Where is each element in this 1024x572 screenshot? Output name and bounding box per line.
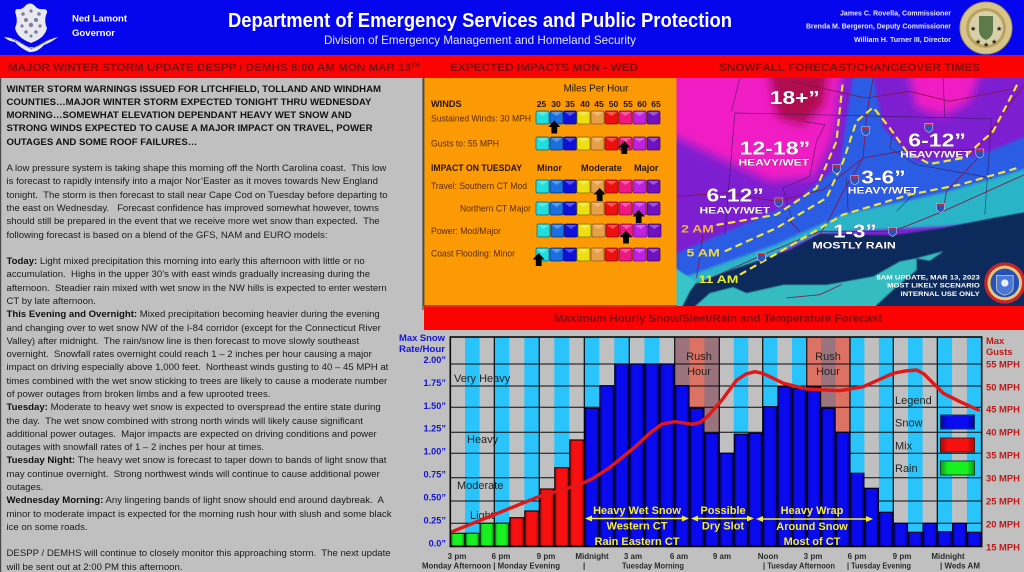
row labels: Minor — [537, 163, 562, 173]
callout: heavy wrap around snow — [756, 505, 873, 548]
wind scale numbers: 50 — [609, 99, 618, 109]
right axis labels: 55 MPH — [986, 358, 1020, 370]
icon: DESPP seal: ★ — [991, 38, 997, 46]
callout: heavy wet snow: Western CT — [607, 520, 668, 532]
callout: possible dry slot — [691, 505, 754, 532]
legend: Mix — [895, 440, 913, 452]
legend: Legend — [895, 395, 932, 407]
time axis labels: 9 pm — [537, 552, 555, 561]
callout: heavy wet snow: Heavy Wet Snow — [593, 505, 681, 517]
title: Department of Emergency Services and Public Protection — [228, 10, 732, 32]
legend — [895, 395, 974, 475]
snowfall labels: 18+” — [770, 87, 820, 108]
rush hour labels: Hour — [687, 366, 711, 378]
time axis labels: Noon — [758, 552, 778, 561]
icon: DESPP seal: ★ — [983, 41, 989, 49]
wind scale numbers: 60 — [637, 99, 647, 109]
scale row: travel northern — [536, 202, 660, 215]
callout: heavy wet snow — [585, 505, 689, 548]
update note: 8AM UPDATE, MAR 13, 2023 — [876, 274, 981, 281]
period axis labels — [422, 562, 980, 570]
left axis labels: 1.50” — [424, 401, 446, 411]
update note — [876, 275, 980, 296]
icon: DESPP seal: ★ — [996, 25, 1002, 33]
wind scale numbers: 25 — [537, 99, 546, 109]
time axis labels: 6 pm — [848, 552, 866, 561]
callout: possible dry slot: Possible — [700, 505, 746, 517]
icon: Connecticut state crest — [4, 4, 58, 52]
left axis labels: Max Snow — [399, 333, 446, 343]
snowfall labels: 1-3” — [833, 221, 876, 242]
icon: DESPP seal: ★ — [970, 25, 976, 33]
arrow: travel southern — [594, 188, 606, 201]
governor name: Governor — [72, 28, 115, 38]
row labels: IMPACT ON TUESDAY — [431, 163, 522, 173]
arrow: power — [620, 230, 632, 244]
changeover time labels: 5 AM — [686, 248, 720, 260]
left axis labels: 0.50” — [424, 492, 446, 502]
time axis labels: 9 am — [713, 552, 731, 561]
frame — [450, 337, 982, 546]
rush hour labels: Rush — [686, 351, 712, 363]
right axis labels — [986, 335, 1020, 552]
snowfall labels: HEAVY/WET — [738, 157, 810, 167]
intensity labels: Light — [470, 510, 494, 522]
legend: Snow — [895, 418, 923, 430]
row labels: Major — [634, 163, 659, 173]
row labels: Northern CT Major — [460, 204, 531, 214]
period axis labels: Tuesday Morning — [622, 562, 684, 570]
row labels: Coast Flooding: Minor — [431, 248, 515, 258]
highway shields — [757, 123, 984, 262]
row labels: Travel: Southern CT Mod — [431, 181, 527, 191]
period axis labels: | — [583, 562, 585, 570]
callout: heavy wet snow: Rain Eastern CT — [595, 536, 680, 548]
time axis labels: 9 pm — [893, 552, 911, 561]
arrow: coast flooding — [533, 253, 545, 266]
governor name: Ned Lamont — [72, 14, 127, 24]
changeover time labels: 11 AM — [698, 274, 738, 286]
right axis labels: Max — [986, 335, 1005, 346]
text block: forecast discussion: WINTER STORM WARNINGS ISSUED FOR LITCHFIELD, TOLLAND AND WINDHAM COUNTIES…MAJOR WINTER STORM EXPECTED TONIGHT THRU WEDNESDAY MORNING…SOMEWHAT ELEVATION DEPENDANT HEAVY WET SNOW AND STRONG WINDS EXPECTED TO CAUSE A MAJOR IMPACT ON TRAVEL, POWER OUTAGES AND SOME ROOF FAILURES… A low pressure system is taking shape this morning off the North Carolina coast. This low is forecast to rapidly intensify into a major Nor’Easter as it moves towards New England tonight. The storm is then forecast to stall near Cape Cod on Tuesday before departing to the east on Wednesday. Forecast confidence has improved somewhat however, towns should still be prepared in the event that we receive more wet snow than expected. The following forecast is based on a blend of the GFS, NAM and EURO models: Today: Light mixed precipitation this morning into early this afternoon with little or no accumulation. Highs in the upper 30’s with east winds gradually increasing during the afternoon. Steadier rain mixed with wet snow in the NW hills is expected to enter western CT by late afternoon. This Evening and Overnight: Mixed precipitation becoming heavier during the evening and changing over to wet snow NW of the I-84 corridor (except for the Connecticut River Valley) after midnight. The rain/snow line is then forecast to move slowly southeast overnight. Snowfall rates overnight could reach 1 – 2 inches per hour causing a major impact on driving especially above 1,000 feet. Northeast winds gusting to 40 – 45 MPH at times combined with the wet snow sticking to trees are likely to cause a moderate number of power outages from broken limbs and a few uprooted trees. Tuesday: Moderate to heavy wet snow is expected to overspread the entire state during the day. The wet snow combined with strong north winds will likely cause significant additional power outages. Major impacts are expected on driving conditions and power outages with snowfall rates of 1 – 2 inches per hour at times. Tuesday Night: The heavy wet snow is forecast to taper down to bands of light snow that may continue overnight. Strong northwest winds will continue to cause additional power outages. Wednesday Morning: Any lingering bands of light snow should end around daybreak. A minor to moderate impact is expected for the morning rush hour with slush and some black ice on some roads. DESPP / DEMHS will continue to closely monitor this approaching storm. The next update will be sent out at 2:00 PM this afternoon. — [6, 84, 392, 572]
left axis labels: 1.75” — [424, 378, 446, 388]
legend: Rain — [895, 463, 918, 475]
period axis labels: | Weds AM — [940, 562, 980, 570]
intensity labels: Heavy — [467, 434, 499, 446]
heading: snowfall forecast: SNOWFALL FORECAST/CHANGEOVER TIMES — [719, 62, 980, 74]
gust line — [452, 370, 978, 532]
period axis labels: Monday Afternoon | Monday Evening — [422, 562, 560, 570]
panel: snowfall map — [676, 78, 1024, 306]
update note: MOST LIKELY SCENARIO — [887, 283, 980, 290]
chart title: Maximum Hourly Snow/Sleet/Rain and Temperature Forecast — [554, 313, 882, 325]
changeover time labels: 2 AM — [681, 224, 714, 236]
wind scale numbers: 55 — [623, 99, 633, 109]
scale row: coast flooding — [536, 248, 660, 261]
commissioners: James C. Rovella, Commissioner — [840, 10, 951, 18]
snowfall labels: 3-6” — [861, 166, 906, 187]
time axis labels: 6 pm — [492, 552, 510, 561]
right axis labels: 35 MPH — [986, 450, 1020, 460]
rush hour labels: Rush — [815, 351, 841, 363]
period axis labels: | Tuesday Afternoon — [763, 562, 835, 570]
scale row: power — [537, 224, 661, 237]
wind scale numbers: 40 — [580, 99, 590, 109]
changeover lines — [716, 85, 1020, 275]
snowfall labels: MOSTLY RAIN — [812, 240, 896, 250]
rush hour labels — [686, 351, 841, 378]
rush hour band: morning — [675, 337, 719, 437]
callout: heavy wrap around snow: Most of CT — [784, 536, 841, 548]
left axis labels: 1.00” — [424, 446, 446, 456]
panel edges — [1, 78, 423, 572]
row labels: Moderate — [581, 163, 622, 173]
arrow: gusts — [618, 141, 630, 154]
commissioners — [806, 10, 951, 44]
intensity labels: Very Heavy — [454, 373, 511, 385]
mix bars — [510, 440, 584, 546]
left axis labels: 1.25” — [424, 424, 446, 434]
snow bars — [585, 364, 981, 546]
left axis labels: 2.00” — [424, 355, 446, 365]
time axis labels — [448, 552, 965, 561]
row labels: Power: Mod/Major — [431, 226, 501, 236]
callout: heavy wrap around snow: Around Snow — [776, 521, 848, 533]
left axis labels: 0.0” — [429, 538, 446, 548]
right axis labels: 30 MPH — [986, 472, 1020, 484]
callout: heavy wrap around snow: Heavy Wrap — [781, 505, 844, 517]
row labels: Gusts to: 55 MPH — [431, 138, 499, 148]
wind scale numbers: 45 — [594, 99, 604, 109]
changeover time labels — [681, 224, 738, 286]
snowfall labels: HEAVY/WET — [699, 205, 771, 215]
wind scale numbers: 65 — [651, 99, 661, 109]
impact heading: miles per hour: Miles Per Hour — [564, 84, 629, 94]
commissioners: William H. Turner III, Director — [854, 37, 951, 44]
rush hour labels: Hour — [816, 366, 840, 378]
right axis labels: 25 MPH — [986, 496, 1020, 506]
left axis labels — [399, 333, 446, 548]
period axis labels: | Tuesday Evening — [847, 562, 911, 570]
time axis labels: 6 am — [670, 552, 688, 561]
icon: map seal — [984, 262, 1024, 304]
chart: snow rate and gusts — [450, 337, 982, 548]
commissioners: Brenda M. Bergeron, Deputy Commissioner — [806, 24, 951, 30]
callout: possible dry slot: Dry Slot — [702, 520, 744, 532]
panel: impacts — [423, 78, 677, 306]
right axis labels: 20 MPH — [986, 518, 1020, 530]
wind scale numbers: 35 — [565, 99, 575, 109]
time axis labels: Midnight — [931, 552, 965, 561]
chart title bar — [424, 305, 1024, 330]
right axis labels: 15 MPH — [986, 542, 1020, 552]
scale row: travel southern — [536, 180, 660, 193]
scale row: gusts — [536, 137, 660, 150]
row labels: Sustained Winds: 30 MPH — [431, 114, 531, 124]
highways — [676, 78, 1024, 298]
snowfall labels — [699, 87, 971, 250]
left axis labels: Rate/Hour — [399, 344, 445, 354]
time axis labels: 3 pm — [804, 552, 822, 561]
governor name — [72, 14, 127, 38]
icon: DESPP seal: ★ — [975, 38, 981, 46]
snowfall labels: HEAVY/WET — [848, 185, 919, 195]
row labels: WINDS — [431, 99, 462, 109]
intensity labels — [454, 373, 511, 522]
wind scale numbers: 30 — [551, 99, 561, 109]
scale row: sustained winds — [536, 111, 660, 124]
time axis labels: 3 pm — [448, 552, 466, 561]
time axis labels: 3 am — [624, 552, 642, 561]
snowfall labels: 6-12” — [908, 129, 966, 150]
right axis labels: 45 MPH — [986, 404, 1020, 414]
heading: storm update: TH — [411, 62, 420, 69]
subtitle: Division of Emergency Management and Homeland Security — [324, 34, 636, 47]
striped background — [450, 337, 982, 546]
section header bar — [0, 55, 1024, 78]
arrow: travel northern — [633, 210, 645, 223]
row labels — [431, 99, 659, 258]
icon: DESPP seal — [960, 2, 1012, 54]
wind scale numbers — [537, 99, 661, 109]
update note: INTERNAL USE ONLY — [900, 291, 980, 298]
header banner — [0, 0, 1024, 55]
time axis labels: Midnight — [575, 552, 609, 561]
rain bars — [451, 523, 509, 546]
heading: expected impacts: EXPECTED IMPACTS MON - WED — [450, 62, 638, 74]
left axis labels: 0.75” — [424, 470, 446, 480]
intensity labels: Moderate — [457, 480, 503, 492]
left axis labels: 0.25” — [424, 516, 446, 526]
heading: storm update: MAJOR WINTER STORM UPDATE DESPP / DEMHS 8:00 AM MON MAR 13 — [8, 62, 411, 74]
snowfall labels: 6-12” — [706, 185, 764, 206]
state borders — [725, 78, 991, 235]
right axis labels: 50 MPH — [986, 382, 1020, 392]
right axis labels: Gusts — [986, 346, 1013, 357]
rush hour band: evening — [807, 337, 850, 437]
snowfall labels: HEAVY/WET — [900, 149, 971, 159]
right axis labels: 40 MPH — [986, 426, 1020, 438]
arrow: sustained winds — [548, 120, 560, 134]
snowfall labels: 12-18” — [739, 137, 810, 158]
